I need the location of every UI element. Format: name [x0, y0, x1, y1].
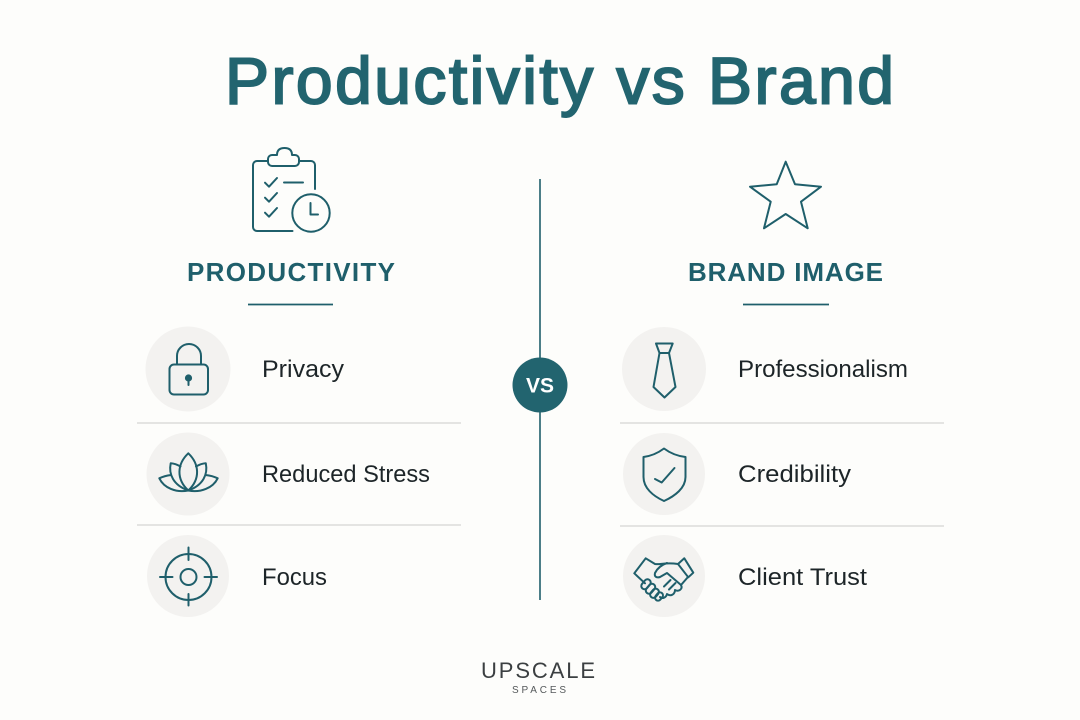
- logo: upscale spaces: UPSCALE: [481, 658, 595, 683]
- label: reduced stress: Reduced Stress: [262, 461, 430, 488]
- row: reduced stress: [146, 432, 430, 516]
- panel: brand image: [620, 162, 944, 617]
- row: client trust: [623, 535, 867, 617]
- icon: handshake: [634, 558, 693, 602]
- icon: necktie: [654, 344, 676, 398]
- icon: lotus: [159, 453, 218, 491]
- row: focus: [147, 535, 327, 617]
- icon: shield with check: [644, 448, 686, 501]
- icon: star: [750, 162, 821, 228]
- logo: upscale spaces: [481, 658, 595, 696]
- label: privacy: Privacy: [262, 356, 344, 383]
- row: privacy: [146, 326, 344, 412]
- panel: productivity: [137, 148, 461, 617]
- icon: padlock: [170, 344, 208, 394]
- label: professionalism: Professionalism: [738, 356, 908, 383]
- center divider with vs badge: [512, 179, 568, 600]
- logo: upscale spaces: SPACES: [512, 685, 566, 696]
- row: professionalism: [622, 327, 908, 411]
- heading: productivity: PRODUCTIVITY: [187, 257, 395, 287]
- label: credibility: Credibility: [738, 461, 851, 488]
- label: focus: Focus: [262, 564, 327, 591]
- row: credibility: [623, 433, 851, 515]
- center divider with vs badge: VS: [526, 374, 554, 398]
- title: Productivity vs Brand: [225, 44, 894, 118]
- icon: target: [160, 548, 217, 606]
- icon: clipboard with clock: [253, 148, 330, 232]
- heading: brand image: BRAND IMAGE: [688, 257, 883, 287]
- label: client trust: Client Trust: [738, 564, 867, 591]
